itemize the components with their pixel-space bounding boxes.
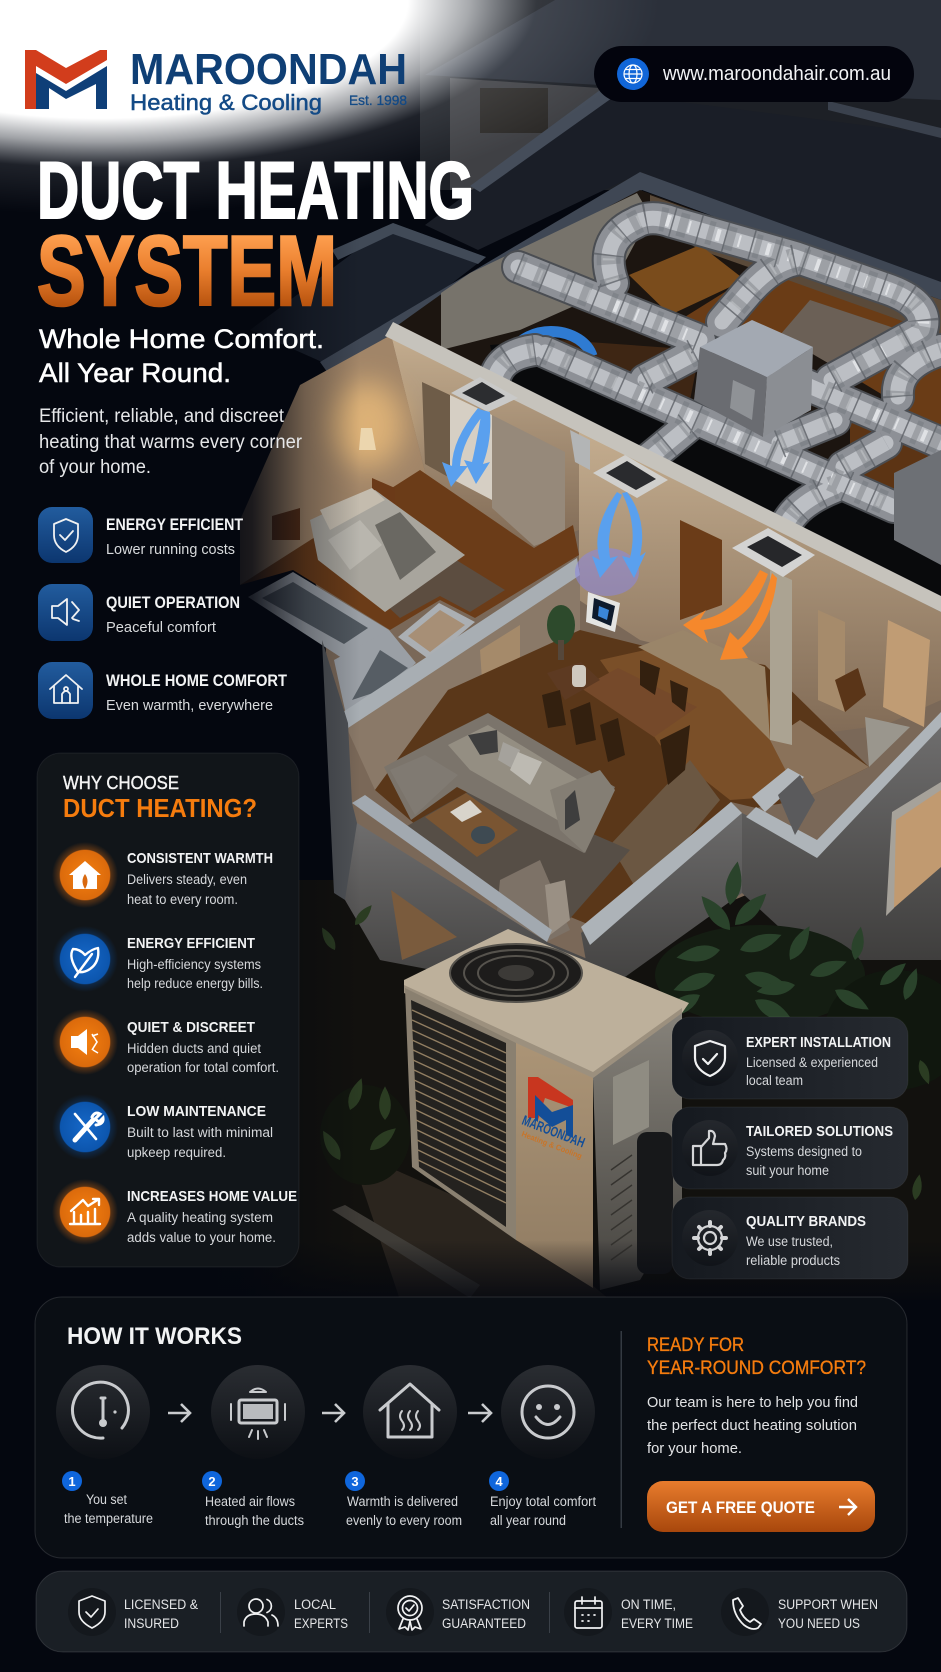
title: SYSTEM [37,215,337,326]
call to action text: for your home. [647,1440,742,1457]
licensed and insured: INSURED [124,1616,179,1631]
satisfaction guaranteed: SATISFACTION [442,1597,530,1612]
step 3: warm house: Warmth is delivered [347,1494,458,1509]
bed [310,490,465,612]
on time [564,1588,693,1636]
intro text: Efficient, reliable, and discreet [39,406,285,427]
item: consistent warmth [52,842,273,908]
front wall and rooms [240,335,941,1000]
subtitle [39,324,324,388]
blue air flow arrows [442,408,646,596]
support [721,1588,878,1636]
satisfaction guaranteed: GUARANTEED [442,1616,526,1631]
fan [450,944,582,1002]
heading: HOW IT WORKS [67,1323,242,1350]
feature: quiet operation [38,584,240,641]
feature: energy efficient [38,507,243,563]
feature: energy efficient: Lower running costs [106,541,235,558]
heading [63,773,257,823]
licensed and insured: LICENSED & [124,1597,198,1612]
call to action heading [647,1335,866,1379]
item: quiet and discreet: QUIET & DISCREET [127,1019,255,1036]
item: energy efficient: High-efficiency systems [127,957,261,972]
side outer wall [322,640,389,900]
item: energy efficient [52,926,263,992]
dark bottom overlay [0,1240,941,1310]
arrow [468,1404,491,1422]
icon: thumbs up [682,1120,738,1176]
step 4: smile: all year round [490,1513,566,1528]
feature: whole home comfort: Even warmth, everywhere [106,697,273,714]
item: low maintenance: upkeep required. [127,1145,226,1160]
card: quality brands: reliable products [746,1253,840,1268]
call to action text [647,1394,858,1457]
step 4: smile: 4 [495,1474,503,1489]
ducts [494,218,941,533]
main floors [375,630,869,925]
support: YOU NEED US [778,1616,860,1631]
bedroom floor [240,470,579,630]
card: expert installation [672,1017,908,1099]
nightstand [372,478,395,505]
unit logo: MAROONDAH [520,1112,587,1150]
call to action heading: YEAR-ROUND COMFORT? [647,1358,866,1379]
curtains [422,382,450,478]
item: quiet and discreet [52,1009,279,1075]
card: tailored solutions: TAILORED SOLUTIONS [746,1123,893,1140]
icon: gear [682,1210,738,1266]
step 1: thermostat: the temperature [64,1511,153,1526]
icon: shield [54,519,78,552]
step 2: ducted unit: Heated air flows [205,1494,295,1509]
logo: MAROONDAH [130,45,407,94]
window [480,625,520,680]
panel: how it works [35,1297,907,1558]
heading: WHY CHOOSE [63,773,179,793]
subtitle: Whole Home Comfort. [39,324,324,354]
front wall cap [385,322,941,612]
icon: shield [682,1030,738,1086]
item: quiet and discreet: Hidden ducts and quiet [127,1041,261,1056]
local experts: EXPERTS [294,1616,348,1631]
item: energy efficient: ENERGY EFFICIENT [127,935,255,952]
icon: globe [617,58,649,90]
step 4: smile: Enjoy total comfort [490,1494,596,1509]
card: expert installation: EXPERT INSTALLATION [746,1034,891,1051]
outer walls [352,795,552,942]
intro text: heating that warms every corner [39,432,303,453]
card: quality brands: QUALITY BRANDS [746,1213,866,1230]
logo: Heating & Cooling [130,90,322,115]
plant [547,605,575,660]
item: energy efficient: help reduce energy bills. [127,976,263,991]
feature: quiet operation: QUIET OPERATION [106,594,240,612]
unit logo [520,1077,587,1161]
dark left overlay [0,140,360,1310]
title: DUCT HEATING [37,146,474,236]
item: low maintenance [52,1094,273,1160]
satisfaction guaranteed [386,1588,530,1636]
local experts: LOCAL [294,1597,336,1612]
licensed and insured [68,1588,198,1636]
step 1: thermostat: You set [86,1492,127,1507]
armchair [495,860,570,950]
item: consistent warmth: Delivers steady, even [127,872,247,887]
card: expert installation: Licensed & experienced [746,1055,878,1070]
feature: energy efficient: ENERGY EFFICIENT [106,516,243,534]
feature: whole home comfort: WHOLE HOME COMFORT [106,672,287,690]
garden foliage and gravel [318,860,941,1300]
intro text [39,406,303,478]
unit logo: Heating & Cooling [520,1129,583,1161]
feature: whole home comfort [38,662,287,719]
outdoor air conditioning unit [404,929,689,1290]
sofa [384,713,615,853]
item: low maintenance: LOW MAINTENANCE [127,1103,266,1120]
side window [888,787,941,913]
lamp [359,428,376,450]
step 2: ducted unit: through the ducts [205,1513,304,1528]
item: increases home value: INCREASES HOME VALUE [127,1188,297,1205]
card: tailored solutions: suit your home [746,1163,829,1178]
heading: DUCT HEATING? [63,793,257,823]
item: increases home value: A quality heating system [127,1210,273,1225]
step 4: smile [489,1365,596,1528]
icon: house [50,675,82,703]
item: increases home value: adds value to your home. [127,1230,276,1245]
arrow [168,1404,190,1422]
card: expert installation: local team [746,1073,803,1088]
button: get a free quote [647,1481,875,1532]
item: increases home value [52,1179,297,1245]
arrow [322,1404,344,1422]
bathroom units [248,572,389,660]
step 2: ducted unit [202,1365,305,1528]
card: quality brands: We use trusted, [746,1234,833,1249]
wall thermostat [586,592,620,632]
icon: speaker muted [52,599,79,625]
intro text: of your home. [39,457,151,478]
column and door [770,570,792,745]
logo [25,45,407,115]
website pill [594,46,914,102]
step 3: warm house: 3 [351,1474,359,1489]
call to action heading: READY FOR [647,1335,744,1356]
panel: why choose duct heating [37,753,299,1267]
on time: EVERY TIME [621,1616,693,1631]
plenum box [694,320,941,565]
website pill: www.maroondahair.com.au [662,63,891,85]
item: low maintenance: Built to last with minimal [127,1125,273,1140]
living wall [343,568,580,790]
card: tailored solutions [672,1107,908,1189]
on time: ON TIME, [621,1597,676,1612]
step 1: thermostat: 1 [68,1474,76,1489]
local experts [237,1588,348,1636]
coffee table [425,793,518,857]
card: tailored solutions: Systems designed to [746,1144,862,1159]
support: SUPPORT WHEN [778,1597,878,1612]
item: consistent warmth: heat to every room. [127,892,238,907]
step 3: warm house: evenly to every room [346,1513,462,1528]
bottom background [0,1310,941,1672]
ceiling vents [451,377,815,577]
button: get a free quote: GET A FREE QUOTE [666,1498,815,1517]
subtitle: All Year Round. [39,358,231,388]
trust bar [36,1571,907,1652]
feature: quiet operation: Peaceful comfort [106,619,217,636]
house cutaway illustration [200,0,941,1300]
dining table and chairs [542,660,697,785]
card: quality brands [672,1197,908,1279]
title [37,146,474,326]
orange air flow arrows [683,570,777,660]
call to action text: Our team is here to help you find [647,1394,858,1411]
item: consistent warmth: CONSISTENT WARMTH [127,850,273,867]
attic interior [391,190,941,610]
step 1: thermostat [56,1365,153,1526]
step 2: ducted unit: 2 [208,1474,216,1489]
logo: Est. 1998 [349,92,407,108]
item: quiet and discreet: operation for total comfort. [127,1060,279,1075]
call to action text: the perfect duct heating solution [647,1417,857,1434]
step 3: warm house [345,1365,462,1528]
rug [400,785,630,930]
white header glow [0,0,660,215]
